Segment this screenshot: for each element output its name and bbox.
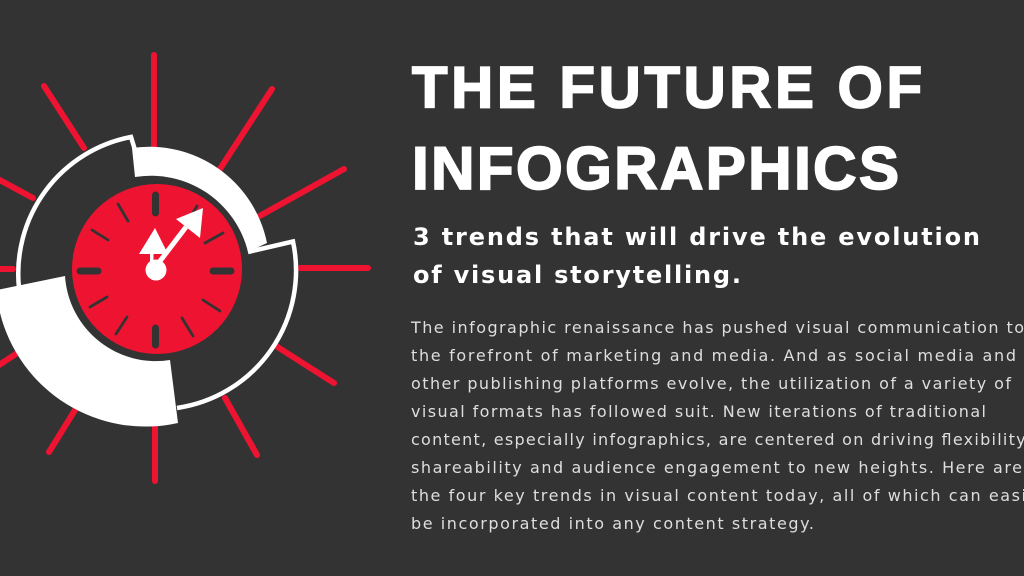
thick white arc: top right: [132, 147, 267, 252]
body paragraph: be incorporated into any content strategy.: [411, 514, 814, 533]
title: [412, 56, 922, 202]
body paragraph: shareability and audience engagement to new heights. Here are: [411, 458, 1022, 477]
subtitle: of visual storytelling.: [413, 261, 741, 289]
body paragraph: content, especially infographics, are centered on driving flexibility,: [411, 430, 1024, 449]
red clock face: [72, 184, 242, 354]
thin ring segment: upper left: [18, 137, 135, 288]
sunburst rays: [0, 55, 368, 481]
title: INFOGRAPHICS: [412, 135, 899, 202]
subtitle: 3 trends that will drive the evolution: [413, 223, 980, 251]
thick white arc: bottom left: [0, 276, 178, 427]
title: THE FUTURE OF: [412, 56, 922, 120]
subtitle: [413, 223, 980, 289]
thin ring segment: lower right: [177, 242, 296, 408]
body paragraph: [410, 318, 1024, 533]
body paragraph: The infographic renaissance has pushed visual communication to: [410, 318, 1024, 337]
clock hands: [139, 208, 203, 280]
body paragraph: the forefront of marketing and media. And as social media and: [411, 346, 1016, 365]
body paragraph: other publishing platforms evolve, the utilization of a variety of: [411, 374, 1011, 393]
icon: clock with radiating lines: [0, 55, 368, 481]
clock hour ticks: [80, 195, 231, 345]
body paragraph: visual formats has followed suit. New iterations of traditional: [411, 402, 986, 421]
